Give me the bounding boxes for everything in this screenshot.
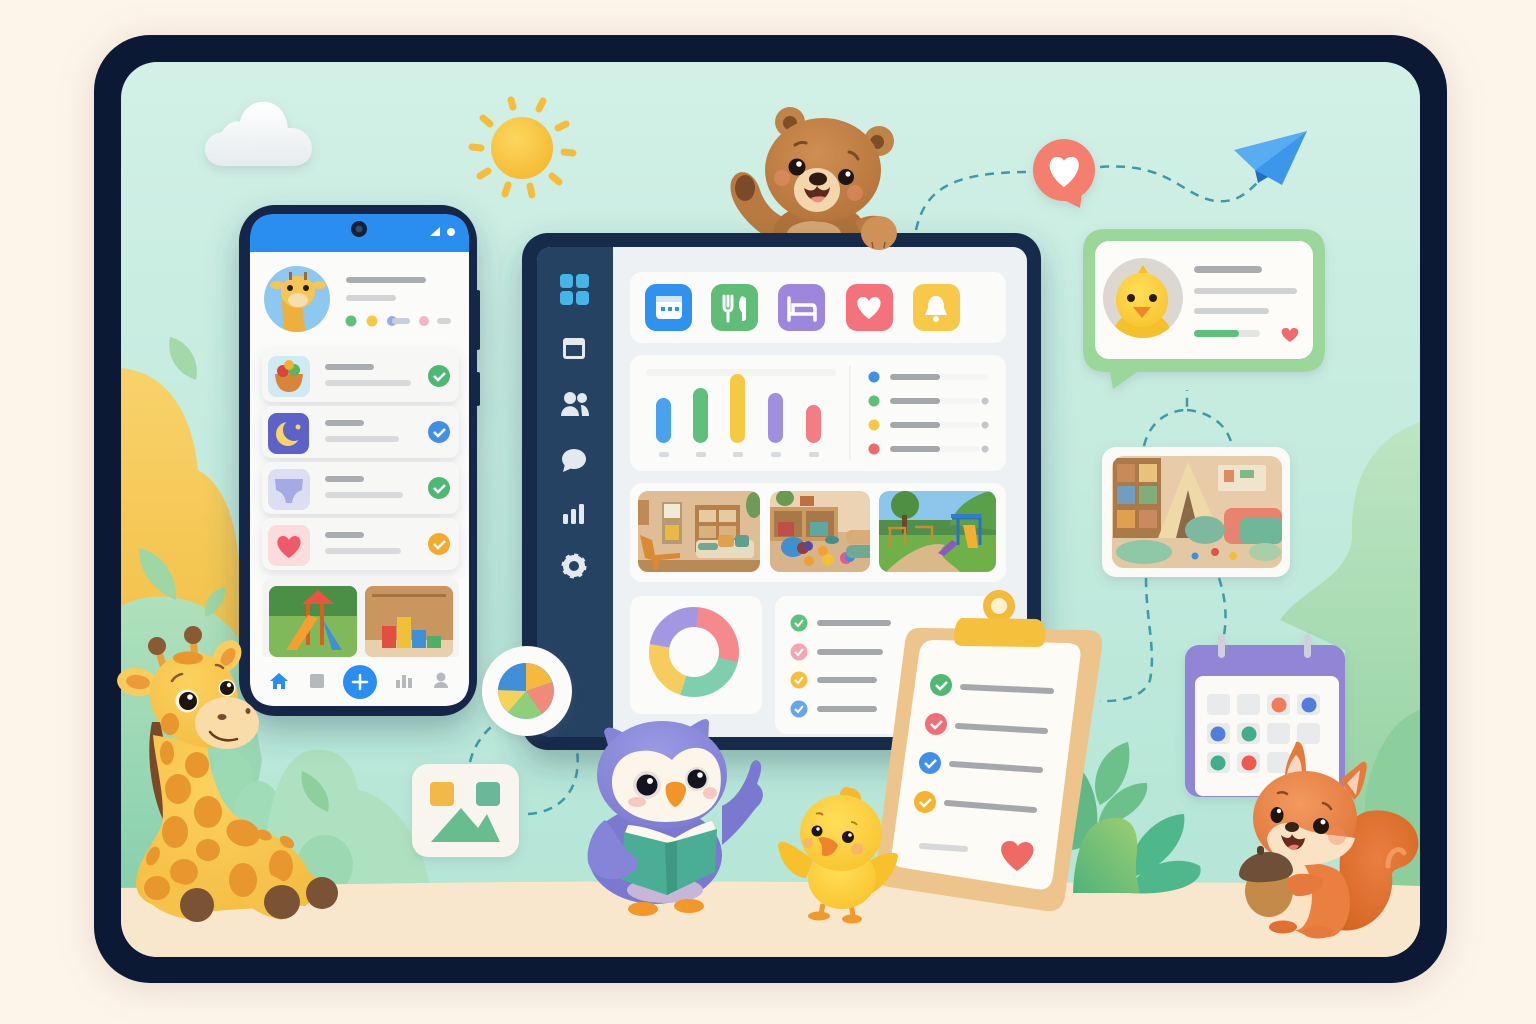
bear head (765, 118, 881, 222)
giraffe head (150, 653, 238, 748)
calendar card (1185, 634, 1345, 797)
giraffe spots (143, 741, 296, 885)
dashed connector: heart to plane (1100, 166, 1258, 201)
photo: playground (879, 491, 996, 572)
giraffe thigh leg (229, 864, 292, 920)
bear raised arm (731, 172, 790, 234)
icon: cutlery button (711, 284, 758, 331)
photo: blocks (365, 586, 453, 657)
bear paw pad (735, 175, 755, 201)
phone profile (264, 266, 451, 335)
giraffe front leg (140, 872, 195, 920)
icon: giraffe avatar (270, 272, 326, 335)
owl head (597, 721, 727, 829)
hill: yellow left (121, 368, 241, 640)
giraffe thigh spot (229, 863, 257, 897)
giraffe ears (115, 635, 247, 699)
leaf: small left (205, 587, 225, 617)
owl eyes (633, 767, 709, 799)
checklist items (914, 674, 1051, 871)
giraffe front leg spot (144, 876, 170, 900)
clipboard (875, 594, 1102, 911)
giraffe thigh hoof (264, 885, 300, 919)
photo: toys (770, 490, 876, 572)
owl book pages (624, 821, 717, 845)
tablet sidebar (537, 247, 613, 737)
giraffe top spot (173, 652, 203, 664)
bear face (774, 142, 863, 212)
icon: bell button (913, 284, 960, 331)
icon: heart button (846, 284, 893, 331)
chick tuft (840, 787, 861, 800)
giraffe body (136, 735, 312, 912)
dashed connector: photo to calendar (1100, 578, 1226, 701)
icon: grid (560, 274, 589, 305)
dashed connector: chat to photo (1144, 390, 1232, 446)
icon: gear (563, 555, 585, 577)
icon: chat (562, 449, 586, 472)
owl beak (666, 782, 686, 807)
giraffe horn tips (148, 626, 202, 655)
owl book (622, 829, 717, 895)
owl cheeks (628, 787, 717, 807)
chick wings (778, 842, 898, 895)
chick feet (808, 904, 862, 924)
phone nav bar (250, 657, 469, 706)
bear body (773, 205, 866, 234)
floor (121, 882, 1420, 957)
pie badge (482, 646, 572, 736)
leaves scenery (139, 337, 329, 812)
squirrel body (1280, 863, 1350, 938)
giraffe front hoof (180, 888, 214, 922)
giraffe back leg (288, 872, 326, 906)
row: sleep (262, 406, 459, 458)
avatar: chick (1103, 258, 1183, 338)
owl belly (627, 877, 703, 903)
phone header (250, 214, 469, 252)
panel: checklist (775, 596, 1005, 734)
icon: people (561, 392, 589, 416)
background scenery (121, 368, 1420, 957)
acorn (1239, 846, 1293, 917)
squirrel muzzle (1267, 823, 1355, 865)
phone photos (269, 586, 453, 657)
squirrel belly (1280, 860, 1312, 930)
photo: living room (638, 491, 762, 572)
plant right of clipboard (1072, 742, 1201, 893)
giraffe horns (157, 636, 195, 665)
row: diaper (262, 462, 459, 514)
dashed connector: heart to bear (916, 172, 1030, 230)
sun (472, 100, 573, 195)
squirrel face (1270, 792, 1346, 850)
panel: photo strip (630, 483, 1006, 582)
squirrel head (1253, 771, 1357, 865)
row: health (262, 518, 459, 570)
hill: dark right (1365, 710, 1420, 838)
owl (588, 719, 763, 916)
leaf: upper left (169, 337, 197, 380)
hill: green left (121, 597, 262, 890)
dashed connector: gallery to pie (470, 722, 578, 814)
owl book spine (665, 841, 677, 895)
icon: bed button (778, 284, 825, 331)
owl raised wing (722, 760, 763, 845)
giraffe back hoof (306, 877, 338, 909)
icon: heart bubble (1033, 139, 1095, 208)
owl feet (628, 899, 704, 916)
giraffe cheek spot (161, 713, 179, 735)
chick face (803, 813, 863, 856)
giraffe face (172, 665, 250, 740)
owl ears (604, 719, 709, 752)
bushes behind giraffe (226, 750, 429, 884)
squirrel paw (1287, 874, 1323, 896)
bear front paw (855, 216, 897, 250)
hill: green right (1280, 422, 1420, 816)
squirrel tail curl (1388, 850, 1404, 866)
leaf: bottom hill (302, 771, 329, 812)
giraffe mane (149, 722, 170, 820)
squirrel feet (1269, 920, 1333, 938)
giraffe (115, 626, 338, 922)
panel: donut (630, 596, 762, 714)
panel: bar chart (630, 355, 1006, 471)
bear ears (775, 107, 894, 156)
squirrel tail (1338, 810, 1418, 931)
panel: quick actions (630, 272, 1006, 343)
row: food (262, 349, 459, 402)
phone (239, 205, 480, 716)
list rows (262, 349, 459, 570)
photo: slide (269, 586, 357, 657)
icon: bars (563, 504, 584, 524)
leaf: left mid (139, 548, 176, 600)
squirrel ears (1285, 742, 1367, 800)
squirrel (1239, 742, 1418, 938)
icon: calendar button (645, 284, 692, 331)
owl face (612, 748, 721, 822)
gallery icon card (412, 764, 519, 857)
owl body (588, 806, 722, 904)
tablet (522, 233, 1041, 750)
icon: paper plane (1234, 131, 1307, 185)
icon: calendar (563, 338, 585, 359)
owl hand (588, 820, 638, 879)
chick head (800, 795, 882, 871)
chick body (808, 847, 876, 909)
giraffe snout (195, 697, 259, 749)
chat card (1083, 229, 1325, 389)
room photo card (1102, 447, 1290, 577)
clipboard clip (954, 594, 1046, 647)
cloud (205, 102, 312, 166)
bear (731, 107, 894, 247)
chick (778, 787, 898, 924)
